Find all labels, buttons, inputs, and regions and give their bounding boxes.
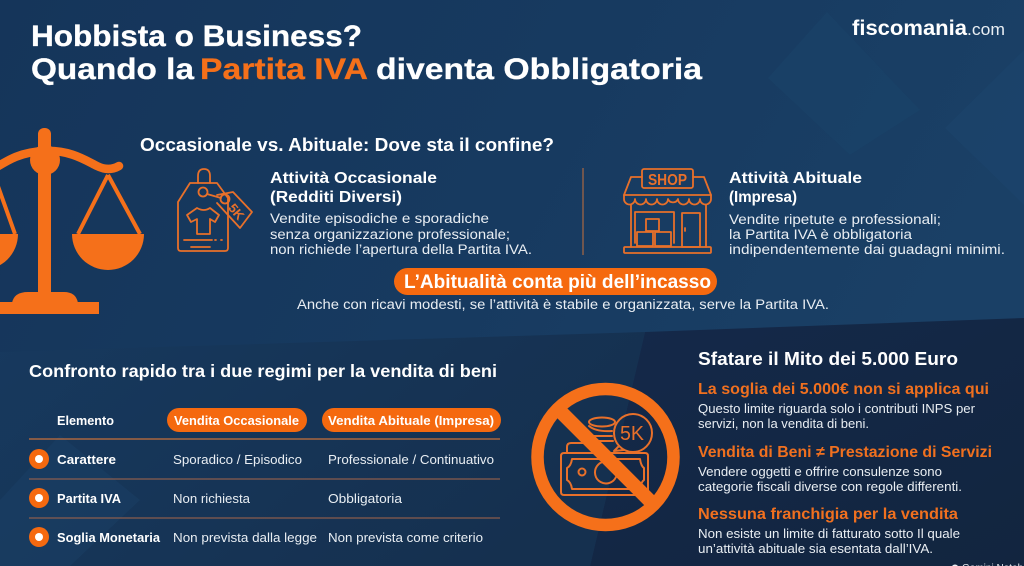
heading xyxy=(729,170,862,206)
title: Hobbista o Business? xyxy=(31,20,362,53)
description: Vendite episodiche e sporadiche xyxy=(270,211,489,226)
title: diventa Obbligatoria xyxy=(376,53,702,86)
logo: .com xyxy=(967,20,1005,39)
panel: attività abituale xyxy=(624,169,1005,257)
myth 2: categorie fiscali diverse con regole differenti. xyxy=(698,479,962,494)
description xyxy=(729,212,1005,257)
logo: fiscomania xyxy=(852,17,967,40)
panel: attività occasionale xyxy=(178,169,532,257)
description: la Partita IVA è obbligatoria xyxy=(729,227,913,242)
row: partita iva xyxy=(29,488,403,508)
section heading: confine: Occasionale vs. Abituale: Dove sta il confine? xyxy=(140,134,554,155)
panel: sfatare il mito xyxy=(698,348,992,556)
callout xyxy=(297,268,829,312)
row: carattere: Professionale / Continuativo xyxy=(328,452,494,467)
title: Quando la xyxy=(31,53,194,86)
heading xyxy=(270,170,437,206)
row: soglia monetaria: Non prevista dalla legge xyxy=(173,530,317,545)
row: carattere xyxy=(29,449,494,469)
callout: Anche con ricavi modesti, se l’attività è stabile e organizzata, serve la Partita IVA. xyxy=(297,297,829,312)
heading: Attività Abituale xyxy=(729,170,862,187)
row: soglia monetaria: Non prevista come criterio xyxy=(328,530,483,545)
icon: no money xyxy=(538,389,674,525)
table header: Vendita Occasionale xyxy=(174,413,299,428)
icon: scales xyxy=(0,128,144,314)
title xyxy=(31,20,702,86)
myth 3: un’attività abituale sia esentata dall’IVA. xyxy=(698,541,933,556)
icon: shop xyxy=(624,169,711,253)
icon: price tags xyxy=(178,169,252,251)
table header xyxy=(57,408,501,432)
myth 1 xyxy=(698,381,989,431)
myth 2: Vendere oggetti e offrire consulenze sono xyxy=(698,464,942,479)
table header: Elemento xyxy=(57,413,114,428)
row: soglia monetaria: Soglia Monetaria xyxy=(57,530,161,545)
description: non richiede l’apertura della Partita IVA. xyxy=(270,242,532,257)
myth 3: Nessuna franchigia per la vendita xyxy=(698,506,958,523)
myth 2 xyxy=(698,444,992,494)
title: Partita IVA xyxy=(200,53,368,86)
row: partita iva: Partita IVA xyxy=(57,491,122,506)
heading: Sfatare il Mito dei 5.000 Euro xyxy=(698,348,958,369)
myth 3: Non esiste un limite di fatturato sotto Il quale xyxy=(698,526,960,541)
heading: (Redditi Diversi) xyxy=(270,189,402,206)
myth 1: servizi, non la vendita di beni. xyxy=(698,416,869,431)
table header: Vendita Abituale (Impresa) xyxy=(328,413,494,428)
row: partita iva: Obbligatoria xyxy=(328,491,403,506)
row: soglia monetaria xyxy=(29,527,483,547)
myth 1: La soglia dei 5.000€ non si applica qui xyxy=(698,381,989,398)
table heading: Confronto rapido tra i due regimi per la vendita di beni xyxy=(29,361,497,381)
heading: Attività Occasionale xyxy=(270,170,437,187)
row: carattere: Carattere xyxy=(57,452,116,467)
comparison table xyxy=(29,408,501,547)
row: carattere: Sporadico / Episodico xyxy=(173,452,302,467)
description: senza organizzazione professionale; xyxy=(270,227,510,242)
icon: no money: 5K xyxy=(620,423,645,445)
callout: L’Abitualità conta più dell’incasso xyxy=(404,271,711,293)
myth 1: Questo limite riguarda solo i contributi INPS per xyxy=(698,401,976,416)
myth 3 xyxy=(698,506,960,556)
description: Vendite ripetute e professionali; xyxy=(729,212,941,227)
heading: (Impresa) xyxy=(729,189,797,206)
icon: price tags: 5K xyxy=(225,200,248,223)
myth 2: Vendita di Beni ≠ Prestazione di Servizi xyxy=(698,444,992,461)
icon: shop: SHOP xyxy=(648,172,687,189)
description xyxy=(270,211,532,257)
row: partita iva: Non richiesta xyxy=(173,491,251,506)
description: indipendentemente dai guadagni minimi. xyxy=(729,242,1005,257)
